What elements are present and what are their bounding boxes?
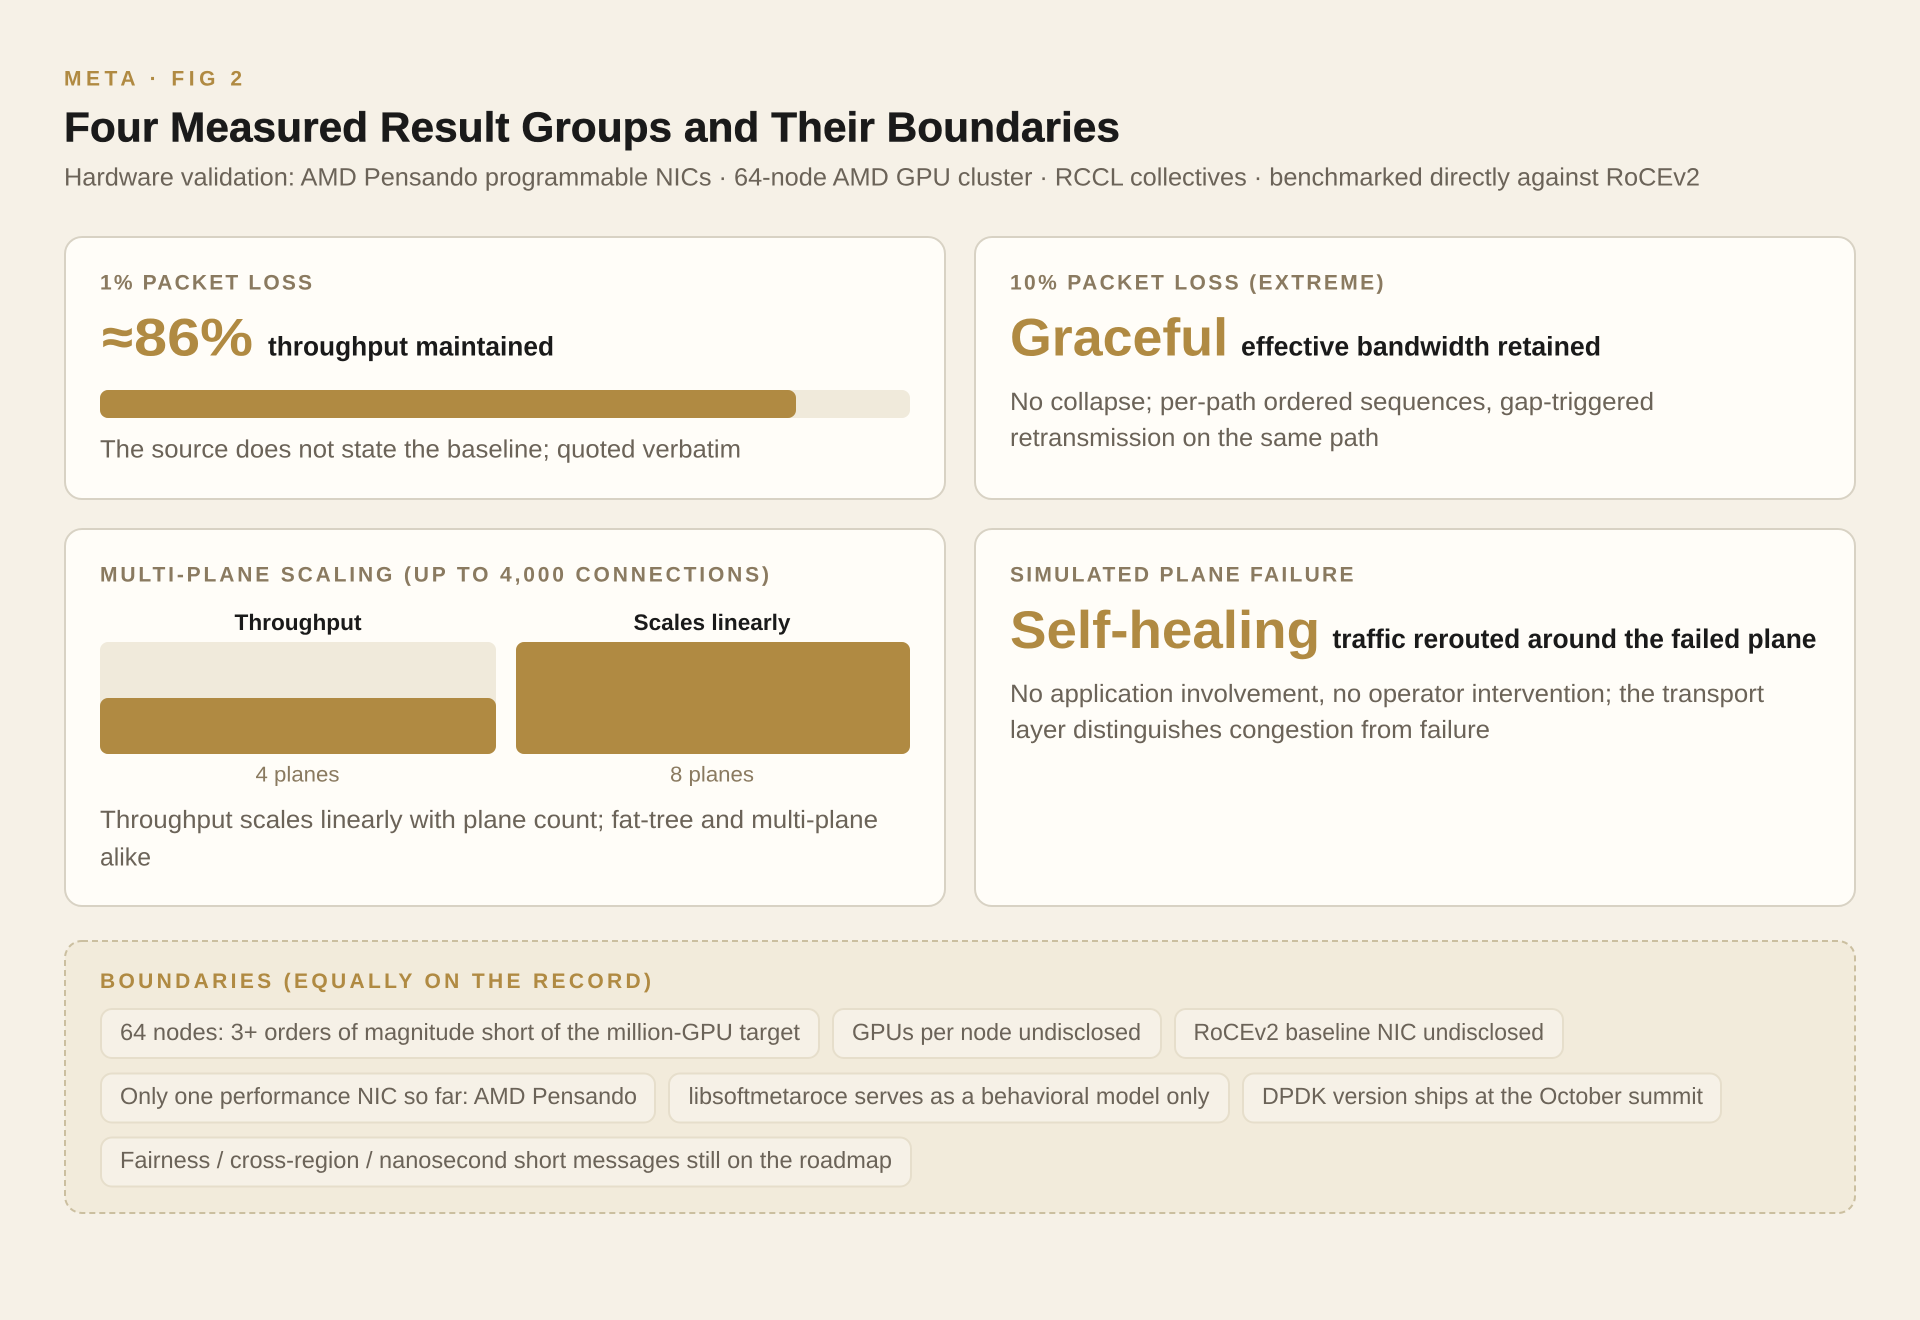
chip: 64 nodes: 64 nodes: 3+ orders of magnitude short of the million-GPU target bbox=[120, 1019, 800, 1045]
chip: roadmap: Fairness / cross-region / nanosecond short messages still on the roadmap bbox=[120, 1147, 892, 1173]
description: No application involvement, no operator intervention; the transport bbox=[1010, 680, 1764, 708]
progress bar bbox=[100, 390, 910, 418]
panel: boundaries bbox=[65, 941, 1855, 1213]
description: alike bbox=[100, 844, 151, 872]
description bbox=[1010, 680, 1764, 744]
panel: simulated plane failure bbox=[975, 529, 1855, 906]
bar chart: 4 planes: 4 planes bbox=[256, 762, 340, 786]
boundaries heading: BOUNDARIES (EQUALLY ON THE RECORD) bbox=[100, 970, 651, 993]
bar chart: 8 planes bbox=[516, 610, 910, 786]
panel label: 1% PACKET LOSS bbox=[100, 272, 312, 294]
title: Four Measured Result Groups and Their Boundaries bbox=[64, 104, 1120, 150]
bar chart: 4 planes: Throughput bbox=[234, 610, 362, 635]
big stat: ≈ bbox=[102, 312, 132, 364]
chip: GPUs per node: GPUs per node undisclosed bbox=[852, 1019, 1141, 1045]
chip: 64 nodes bbox=[101, 1009, 819, 1058]
chip: RoCEv2 baseline: RoCEv2 baseline NIC undisclosed bbox=[1194, 1019, 1544, 1045]
description bbox=[1010, 388, 1654, 452]
panel label: SIMULATED PLANE FAILURE bbox=[1010, 564, 1354, 586]
stat caption: throughput maintained bbox=[268, 332, 554, 362]
chip: DPDK version bbox=[1243, 1074, 1721, 1122]
eyebrow: META · FIG 2 bbox=[64, 68, 242, 90]
chip: libsoftmetaroce: libsoftmetaroce serves as a behavioral model only bbox=[688, 1083, 1210, 1109]
panel label: MULTI-PLANE SCALING (UP TO 4,000 CONNECTIONS) bbox=[100, 564, 769, 586]
stat caption: traffic rerouted around the failed plane bbox=[1332, 624, 1816, 654]
big stat: Self-healing bbox=[1010, 601, 1320, 660]
description: retransmission on the same path bbox=[1010, 424, 1379, 452]
header bbox=[64, 68, 1700, 192]
panel: 1% packet loss bbox=[65, 237, 945, 499]
chip: GPUs per node bbox=[833, 1009, 1161, 1058]
chip: only one NIC: Only one performance NIC so far: AMD Pensando bbox=[120, 1083, 637, 1109]
panel: multi-plane scaling bbox=[65, 529, 945, 906]
bar chart: 4 planes bbox=[100, 610, 496, 786]
stat caption: effective bandwidth retained bbox=[1241, 332, 1601, 362]
chip: libsoftmetaroce bbox=[669, 1074, 1229, 1122]
panel label: 10% PACKET LOSS (EXTREME) bbox=[1010, 272, 1384, 294]
description: Throughput scales linearly with plane count; fat-tree and multi-plane bbox=[100, 806, 878, 834]
note: The source does not state the baseline; quoted verbatim bbox=[100, 436, 741, 464]
description: layer distinguishes congestion from failure bbox=[1010, 716, 1490, 744]
subtitle: Hardware validation: AMD Pensando programmable NICs · 64-node AMD GPU cluster · RCCL collectives · benchmarked directly against RoCEv2 bbox=[64, 164, 1700, 192]
chip: DPDK version: DPDK version ships at the October summit bbox=[1262, 1083, 1703, 1109]
description: No collapse; per-path ordered sequences, gap-triggered bbox=[1010, 388, 1654, 416]
chip: RoCEv2 baseline bbox=[1175, 1009, 1563, 1058]
description bbox=[100, 806, 878, 872]
bar chart: 8 planes: 8 planes bbox=[670, 762, 754, 786]
chip: only one NIC bbox=[101, 1074, 655, 1122]
bar chart: 8 planes: Scales linearly bbox=[634, 610, 791, 635]
big stat: 86% bbox=[134, 308, 253, 368]
chip: roadmap bbox=[101, 1138, 911, 1186]
big stat: Graceful bbox=[1010, 308, 1228, 368]
panel: 10% packet loss bbox=[975, 237, 1855, 499]
